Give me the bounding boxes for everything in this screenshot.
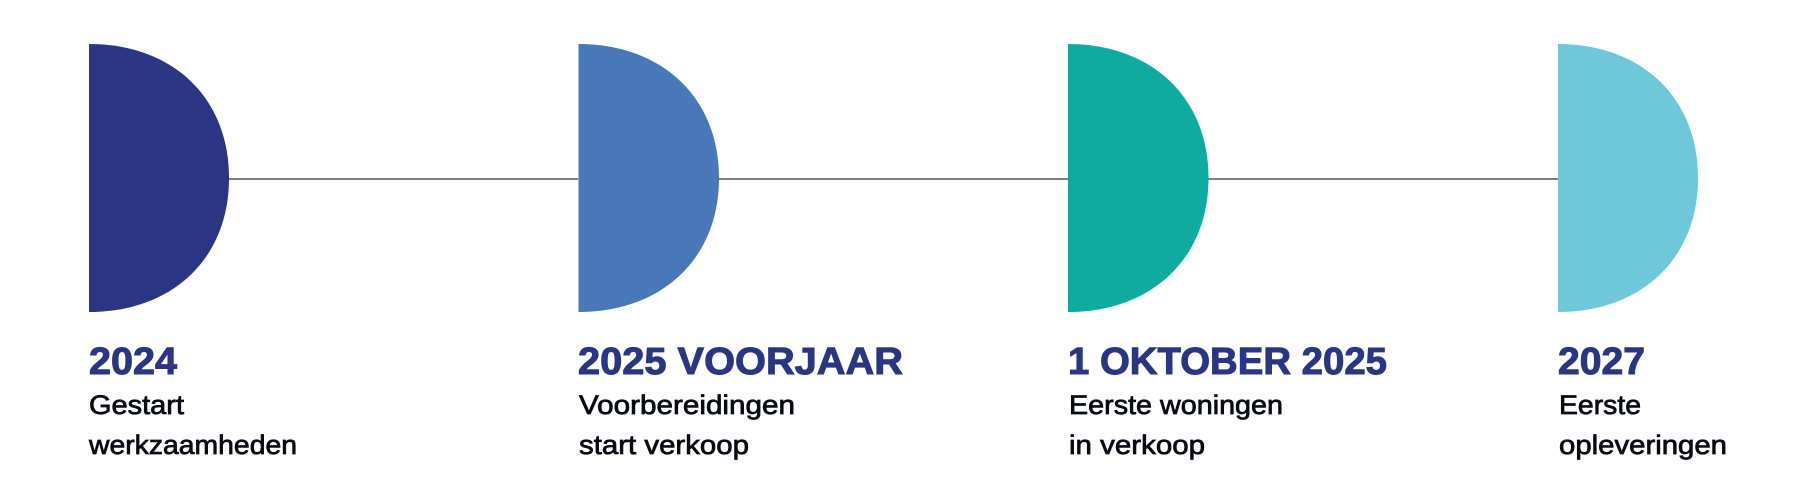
icon: blue half circle <box>578 44 719 312</box>
heading: 2024: 2024 <box>89 341 177 383</box>
milestone: 2027 <box>1558 44 1727 460</box>
heading: 1 OKTOBER 2025: 1 OKTOBER 2025 <box>1068 341 1387 383</box>
text: Voorbereidingen: Voorbereidingen <box>579 390 795 420</box>
milestone: 2025 voorjaar <box>578 44 903 460</box>
connector line: 1 oktober 2025 to 2027 <box>1208 178 1558 180</box>
text: werkzaamheden: werkzaamheden <box>88 430 297 460</box>
connector line: 2025 voorjaar to 1 oktober 2025 <box>719 178 1068 180</box>
icon: light blue half circle <box>1558 44 1698 312</box>
text: Eerste woningen: Eerste woningen <box>1069 390 1283 420</box>
text: in verkoop: in verkoop <box>1069 430 1205 460</box>
milestone: 1 oktober 2025 <box>1068 44 1387 460</box>
milestone: 2024 <box>88 44 297 460</box>
heading: 2025 VOORJAAR: 2025 VOORJAAR <box>578 341 903 383</box>
icon: teal half circle <box>1068 44 1208 312</box>
icon: navy half circle <box>89 44 229 312</box>
text: opleveringen: opleveringen <box>1559 430 1727 460</box>
heading: 2027: 2027 <box>1558 341 1645 383</box>
text: start verkoop: start verkoop <box>579 430 749 460</box>
text: Eerste: Eerste <box>1559 390 1641 420</box>
connector line: 2024 to 2025 voorjaar <box>229 178 578 180</box>
text: Gestart: Gestart <box>89 390 185 420</box>
